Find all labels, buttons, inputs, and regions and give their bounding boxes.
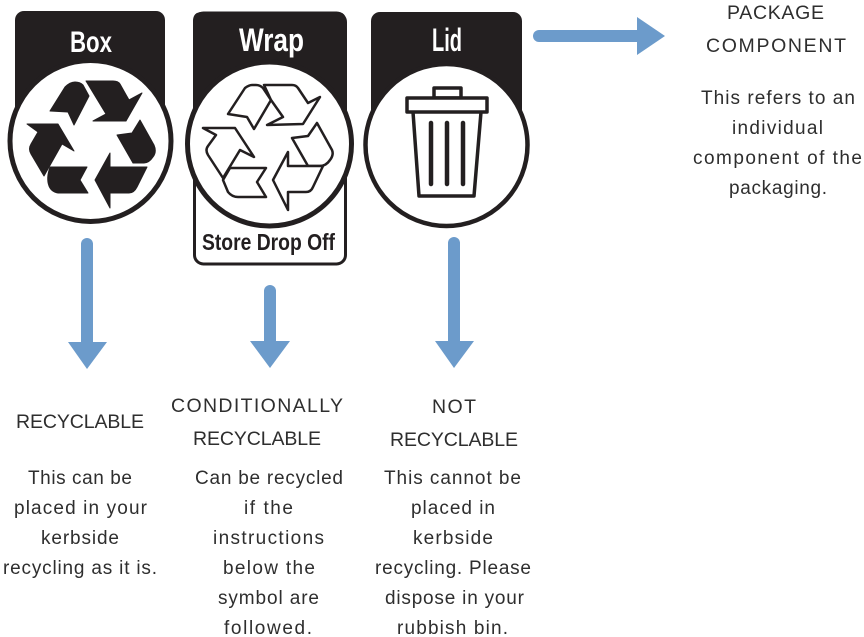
arrow: to package component (539, 17, 665, 55)
label text: Box: Box (70, 26, 112, 59)
heading: package component: COMPONENT (706, 35, 846, 57)
icon: rubbish bin (407, 88, 487, 196)
heading: not recyclable: RECYCLABLE (390, 429, 518, 451)
text: recyclable description: This can be (28, 468, 132, 489)
text: conditionally recyclable description: below the (223, 558, 315, 579)
text: package component description (693, 88, 862, 199)
icon: outlined recycling arrows (203, 85, 333, 210)
text: conditionally recyclable description: symbol are (218, 588, 319, 609)
text: recyclable description: kerbside (41, 528, 119, 549)
icon: solid recycling arrows (27, 81, 155, 208)
text: conditionally recyclable description: instructions (213, 528, 324, 549)
text: conditionally recyclable description: if the (244, 498, 293, 519)
text: recyclable description: recycling as it is. (3, 558, 157, 579)
heading: conditionally recyclable (171, 395, 343, 450)
heading: not recyclable (390, 396, 518, 451)
text: not recyclable description: recycling. Please (375, 558, 531, 579)
label: Box recycling symbol (10, 11, 171, 222)
text: conditionally recyclable description (195, 468, 343, 637)
arrow: box down (68, 244, 107, 369)
text: conditionally recyclable description: Can be recycled (195, 468, 343, 489)
text: not recyclable description (375, 468, 531, 637)
heading: package component (706, 2, 846, 57)
text: not recyclable description: kerbside (413, 528, 493, 549)
label text: Store Drop Off: Store Drop Off (202, 229, 335, 255)
label text: Wrap: Wrap (239, 22, 304, 58)
text: recyclable description (3, 468, 157, 579)
arrow: wrap down (250, 291, 290, 368)
text: package component description: packaging. (729, 178, 827, 199)
label text: Lid: Lid (432, 22, 462, 58)
label: Wrap recycling symbol with store drop off (188, 12, 352, 264)
heading: conditionally recyclable: CONDITIONALLY (171, 395, 343, 417)
heading: recyclable: RECYCLABLE (16, 411, 144, 433)
label: Lid landfill symbol (366, 12, 528, 226)
heading: package component: PACKAGE (727, 2, 824, 24)
text: package component description: component of the (693, 148, 862, 169)
text: package component description: This refers to an (701, 88, 855, 109)
text: not recyclable description: placed in (411, 498, 495, 519)
text: recyclable description: placed in your (14, 498, 148, 519)
text: not recyclable description: dispose in your (385, 588, 525, 609)
text: not recyclable description: This cannot be (384, 468, 521, 489)
heading: conditionally recyclable: RECYCLABLE (193, 428, 321, 450)
arrow: lid down (435, 243, 474, 368)
heading: not recyclable: NOT (432, 396, 476, 418)
text: package component description: individual (732, 118, 823, 139)
